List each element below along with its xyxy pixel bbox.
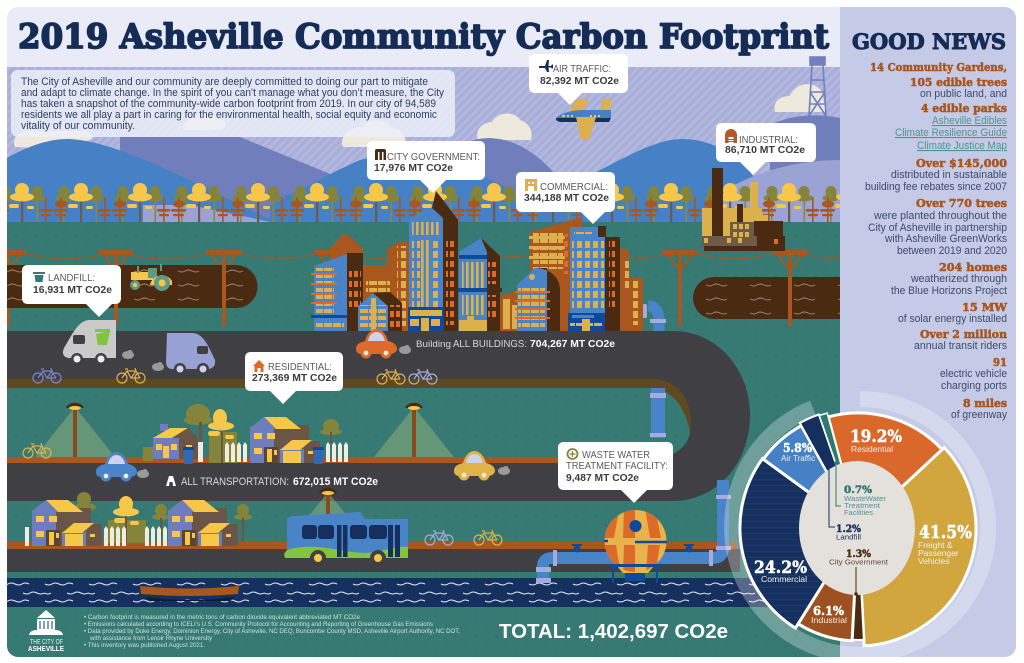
upper water pipe elbow (642, 304, 666, 331)
segment: landfill (800, 414, 858, 528)
good news list: on public land, and (920, 88, 1007, 100)
bicycles (23, 368, 502, 545)
good news list: between 2019 and 2020 (897, 245, 1007, 257)
building: blue tower one (311, 253, 363, 331)
leader lines (827, 461, 858, 596)
good news heading: GOOD NEWS (852, 29, 1006, 54)
label: waste water (844, 484, 886, 517)
label: waste water: 0.7% (844, 484, 872, 496)
callout: landfill: 16,931 MT CO2e (33, 284, 112, 296)
road label: all transportation: 672,015 MT CO2e (293, 476, 378, 488)
callout: city government: 17,976 MT CO2e (374, 162, 453, 174)
garbage truck (63, 320, 116, 365)
road label: all transportation (166, 476, 378, 488)
good news list: Climate Resilience Guide (895, 127, 1007, 139)
good news list (865, 60, 1008, 421)
tractor (130, 264, 172, 291)
good news list: 14 Community Gardens, (870, 60, 1007, 74)
field: landfill soil (7, 265, 258, 325)
label: city government: City Government (829, 558, 889, 566)
good news list: Climate Justice Map (917, 140, 1007, 152)
label: city government (829, 548, 889, 566)
callout: waste water treatment facility (558, 442, 673, 503)
callout: residential: 273,369 MT CO2e (252, 372, 337, 384)
label: residential: Residential (851, 444, 893, 454)
callout: air traffic (529, 54, 628, 105)
intro text block (11, 70, 455, 137)
tree line (0, 183, 878, 222)
river (7, 578, 840, 607)
road label: all buildings: 704,267 MT CO2e (530, 338, 615, 350)
callout: landfill: LANDFILL: (48, 272, 95, 284)
label: landfill: 1.2% (836, 523, 861, 535)
good news list: 8 miles (963, 396, 1007, 410)
footer notes: • This inventory was published August 2021. (84, 642, 205, 649)
building: small blue house block (358, 292, 402, 331)
chart centre (799, 461, 915, 595)
building: rounded blue tower (515, 268, 560, 331)
panel: good news sidebar (840, 7, 1016, 657)
callout: waste water treatment facility: 9,487 MT CO2e (566, 472, 639, 484)
building: brown low block (500, 292, 518, 331)
label: waste water: WasteWater (844, 494, 886, 503)
good news list: 4 edible parks (921, 101, 1007, 115)
segment: waste water (819, 413, 858, 528)
footer notes: • Data provided by Duke Energy, Dominion Energy, City of Asheville, NC DEQ, Buncombe County MSD, Asheville Airport Authority, NC DOT, (84, 628, 460, 635)
water pipes and tank: waste water treatment (536, 480, 731, 583)
label: industrial: 6.1% (813, 604, 845, 618)
callout: city government (367, 141, 485, 193)
callout: residential (245, 352, 343, 404)
intro text block: has taken a snapshot of the community-wide carbon footprint from 2019. In our city of 94,589 (21, 98, 436, 110)
footer notes: • Emissions calculated according to ICELI’s U.S. Community Protocol for Accounting and Reporting of Greenhouse Gas Emissions (84, 621, 434, 628)
callout: air traffic: 82,392 MT CO2e (540, 75, 619, 87)
callout: commercial (516, 172, 615, 224)
good news list: 15 MW (962, 300, 1008, 314)
label: landfill: Landfill (836, 532, 861, 542)
exhaust puffs (122, 345, 510, 478)
road label: all transportation: ALL TRANSPORTATION: (181, 476, 289, 488)
good news list: Over $145,000 (916, 156, 1007, 170)
chart halo ring (732, 399, 988, 655)
road label: all buildings (416, 338, 615, 350)
label: city government: 1.3% (846, 548, 871, 560)
roadside strip (7, 379, 691, 463)
street lamps (35, 402, 454, 515)
title: 2019 Asheville Community Carbon Footprint (18, 17, 829, 57)
bus (284, 512, 408, 566)
label: air traffic: Air Traffic (781, 453, 816, 463)
label: freight: Freight & (918, 540, 953, 550)
building: mid tower (458, 238, 502, 331)
power lines and poles (0, 250, 840, 326)
neighbourhood lower row (25, 492, 252, 546)
building: tall tower (408, 191, 458, 331)
good news list: distributed in sustainable (891, 169, 1007, 181)
good news list: City of Asheville in partnership (868, 222, 1007, 234)
building: big blue tower (568, 226, 620, 331)
field: right soil (693, 277, 840, 326)
segment: commercial (740, 459, 858, 628)
good news list: were planted throughout the (873, 210, 1007, 222)
plane (556, 99, 612, 140)
good news list: weatherized through (910, 273, 1007, 285)
striped sky (7, 67, 840, 176)
segment: air traffic (763, 426, 858, 528)
teal ground (7, 222, 840, 657)
label: freight: 41.5% (919, 522, 972, 543)
lookout tower (809, 57, 826, 116)
good news list: annual transit riders (914, 340, 1007, 352)
intro text block: vitality of our community. (21, 120, 135, 132)
label: commercial: Commercial (761, 574, 807, 584)
good news list: electric vehicle (940, 368, 1007, 380)
factory: industrial (702, 168, 785, 251)
footer notes: • Carbon footprint is measured in the metric tons of carbon dioxide equivalent abbreviated MT CO2e (84, 614, 360, 621)
road label: all buildings: ALL BUILDINGS: (453, 338, 527, 350)
segment: industrial (798, 528, 858, 641)
label: waste water: Treatment (844, 501, 881, 510)
good news list: the Blue Horizons Project (891, 285, 1007, 297)
callout: residential: RESIDENTIAL: (268, 361, 332, 373)
good news list: building fee rebates since 2007 (865, 181, 1007, 193)
clouds (14, 84, 826, 148)
good news list: of greenway (951, 409, 1007, 421)
logo: city of asheville: ASHEVILLE (28, 644, 64, 653)
road label: all buildings: Building (416, 339, 451, 350)
good news list: Asheville Edibles (932, 115, 1007, 127)
cars (96, 329, 495, 482)
callout: commercial: 344,188 MT CO2e (524, 192, 609, 204)
logo: city of asheville: THE CITY OF (30, 639, 63, 646)
neighbourhood upper row (143, 404, 348, 464)
intro text block: and adapt to climate change. In the spirit of you can’t manage what you don’t measure, the City (21, 87, 445, 99)
footer notes: with assistance from Lenoir Rhyne University (89, 635, 213, 642)
segment: residential (828, 413, 942, 528)
label: commercial: 24.2% (754, 558, 807, 578)
good news list: 91 (993, 355, 1007, 369)
footer notes (84, 614, 460, 649)
good news list: with Asheville GreenWorks (884, 233, 1007, 245)
intro text block: residents we all play a part in caring for the environmental health, social equity and economic (21, 109, 438, 121)
callout: commercial: COMMERCIAL: (540, 181, 608, 193)
callout: industrial (716, 123, 816, 175)
buildings (311, 191, 643, 331)
callout: industrial: 86,710 MT CO2e (725, 144, 805, 156)
sky band behind tree line (285, 195, 524, 218)
callout: waste water treatment facility: TREATMENT FACILITY: (566, 460, 668, 472)
label: landfill (836, 523, 861, 542)
header band (7, 7, 840, 67)
good news list: 105 edible trees (910, 75, 1007, 89)
good news list: Over 2 million (920, 327, 1008, 341)
canoe (140, 586, 239, 601)
label: air traffic (781, 441, 816, 463)
lower road (7, 549, 740, 572)
segment: freight and passenger vehicles (858, 448, 976, 646)
label: industrial: Industrial (811, 615, 847, 625)
label: air traffic: 5.8% (783, 441, 813, 455)
label: freight (918, 522, 972, 566)
label: residential (850, 427, 902, 454)
donut chart (732, 399, 988, 655)
good news list: charging ports (941, 380, 1007, 392)
building: right brown block (620, 248, 643, 331)
callout: waste water treatment facility: WASTE WATER (582, 449, 650, 461)
main road (7, 331, 750, 501)
callout: landfill (22, 265, 121, 317)
label: waste water: Facilities (844, 508, 873, 517)
building: back brown house (330, 233, 363, 260)
delivery van (166, 333, 215, 375)
callout: air traffic: AIR TRAFFIC: (553, 63, 611, 75)
callout: city government: CITY GOVERNMENT: (387, 151, 480, 163)
intro text block: The City of Asheville and our community are deeply committed to doing our part to mitigate (21, 76, 428, 88)
total: TOTAL: 1,402,697 CO2e (499, 621, 728, 643)
mountains (7, 115, 840, 225)
callout: industrial: INDUSTRIAL: (739, 134, 798, 146)
segment: city government (852, 528, 864, 640)
label: freight: Passenger (918, 548, 959, 558)
building: brown stepped blocks (363, 242, 410, 331)
good news list: of solar energy installed (898, 313, 1007, 325)
label: residential: 19.2% (850, 427, 902, 447)
good news list: 204 homes (939, 260, 1007, 274)
label: industrial (811, 604, 847, 625)
label: freight: Vehicles (918, 556, 950, 566)
building: back brown stepped tower (529, 217, 582, 331)
logo: city of asheville (28, 610, 64, 653)
lower road strip (7, 542, 737, 549)
good news list: Over 770 trees (916, 196, 1007, 210)
inner vertical water pipe (650, 388, 666, 438)
